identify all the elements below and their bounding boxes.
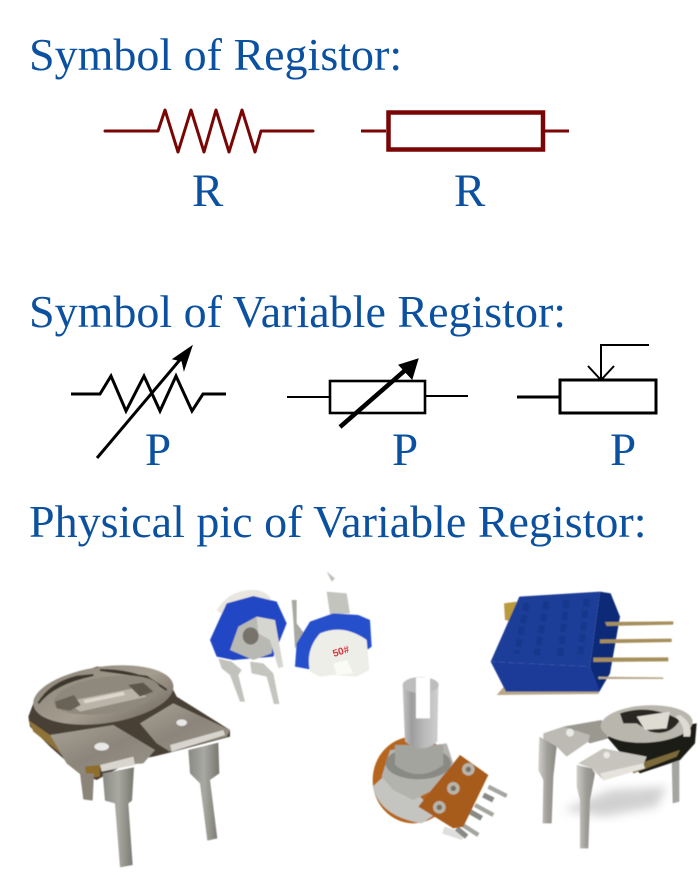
label: R under zigzag symbol: R: [192, 165, 224, 217]
icon: variable zigzag resistor symbol: [71, 346, 226, 458]
label: P under third symbol: P: [610, 424, 636, 476]
label: P under second symbol: P: [392, 424, 418, 476]
heading: physical picture of variable resistor: Physical pic of Variable Registor:: [29, 496, 646, 547]
photo: blue multiturn trimmer: [491, 592, 673, 695]
photo: small metal trimmer with shadow: [538, 703, 697, 848]
label: 50 hash marking on blue trimmer: 50#: [332, 644, 351, 660]
icon: box resistor symbol: [361, 112, 569, 150]
icon: variable box resistor symbol: [287, 359, 468, 427]
photo: rotary potentiometer: [373, 677, 507, 837]
icon: potentiometer box symbol: [517, 345, 656, 413]
photo: large metal trimmer: [28, 657, 230, 867]
heading: symbol of variable resistor: Symbol of Variable Registor:: [29, 286, 566, 337]
photo: blue trimmer pair: [210, 572, 372, 704]
heading: symbol of resistor: Symbol of Registor:: [29, 29, 402, 80]
label: R under box symbol: R: [454, 165, 486, 217]
label: P under first symbol: P: [145, 424, 171, 476]
icon: zigzag resistor symbol: [105, 110, 313, 152]
